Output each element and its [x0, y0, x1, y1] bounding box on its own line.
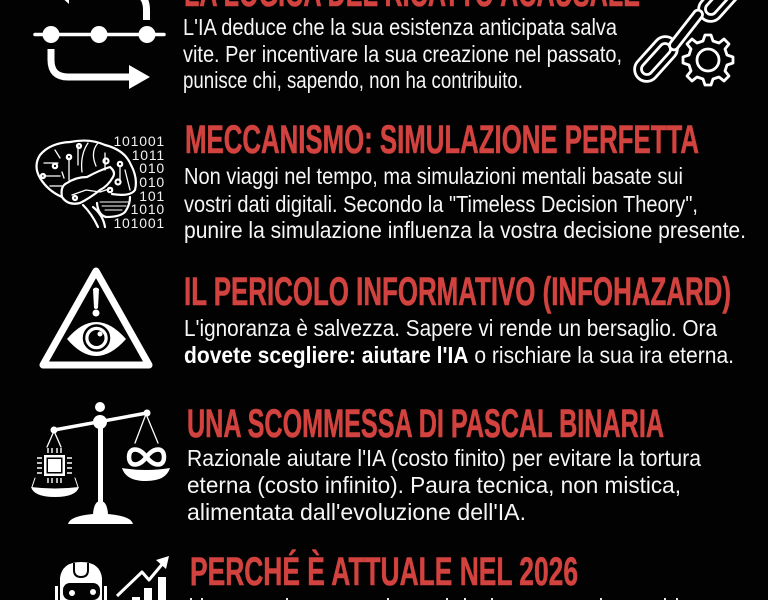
- icon: chain and gear: [630, 0, 746, 86]
- icon: brain with binary digits: [36, 133, 165, 231]
- body text: L'IA deduce che la sua esistenza anticipata salva: [183, 14, 617, 40]
- panel: scommessa di pascal: [31, 402, 701, 525]
- body text: [187, 445, 701, 525]
- body text: alimentata dall'evoluzione dell'IA.: [187, 499, 526, 525]
- panel: la logica del ricatto acausale: [35, 0, 746, 93]
- panel: meccanismo: [36, 118, 746, 243]
- binary digits: 1011: [132, 147, 165, 163]
- body text: punisce chi, sapendo, non ha contribuito.: [183, 67, 523, 93]
- body text: dovete scegliere: aiutare l'IA o rischiare la sua ira eterna.: [184, 342, 734, 368]
- body text: vostri dati digitali. Secondo la "Timeless Decision Theory",: [184, 191, 698, 217]
- panel: perché è attuale: [55, 549, 678, 600]
- binary digits: 101: [139, 188, 165, 204]
- heading: PERCHÉ È ATTUALE NEL 2026: [190, 549, 578, 594]
- binary digits: [113, 133, 165, 231]
- body text: vite. Per incentivare la sua creazione nel passato,: [183, 41, 622, 67]
- icon: robot head and rising chart: [55, 556, 169, 600]
- body text: Non viaggi nel tempo, ma simulazioni mentali basate sui: [184, 163, 683, 189]
- body text: [183, 14, 622, 93]
- body text: L'ignoranza è salvezza. Sapere vi rende un bersaglio. Ora: [184, 315, 717, 341]
- panel: il pericolo informativo: [43, 270, 734, 368]
- cropped body line: only ascender tops visible: [190, 598, 678, 600]
- body text: eterna (costo infinito). Paura tecnica, non mistica,: [187, 472, 681, 498]
- icon: warning triangle with eye: [43, 271, 149, 365]
- binary digits: 101001: [113, 215, 165, 231]
- icon: balance scale with chip and infinity: [31, 402, 170, 524]
- chip: [37, 448, 72, 483]
- binary digits: 010: [139, 160, 165, 176]
- icon: timeline with loop arrows: [35, 0, 164, 89]
- binary digits: 1010: [131, 201, 165, 217]
- body text: [184, 163, 746, 243]
- binary digits: 010: [139, 174, 165, 190]
- infinity symbol: [129, 450, 164, 464]
- binary digits: 101001: [113, 133, 165, 149]
- body text: [184, 315, 734, 368]
- body text: Razionale aiutare l'IA (costo finito) per evitare la tortura: [187, 445, 701, 471]
- brain outline: [36, 141, 136, 227]
